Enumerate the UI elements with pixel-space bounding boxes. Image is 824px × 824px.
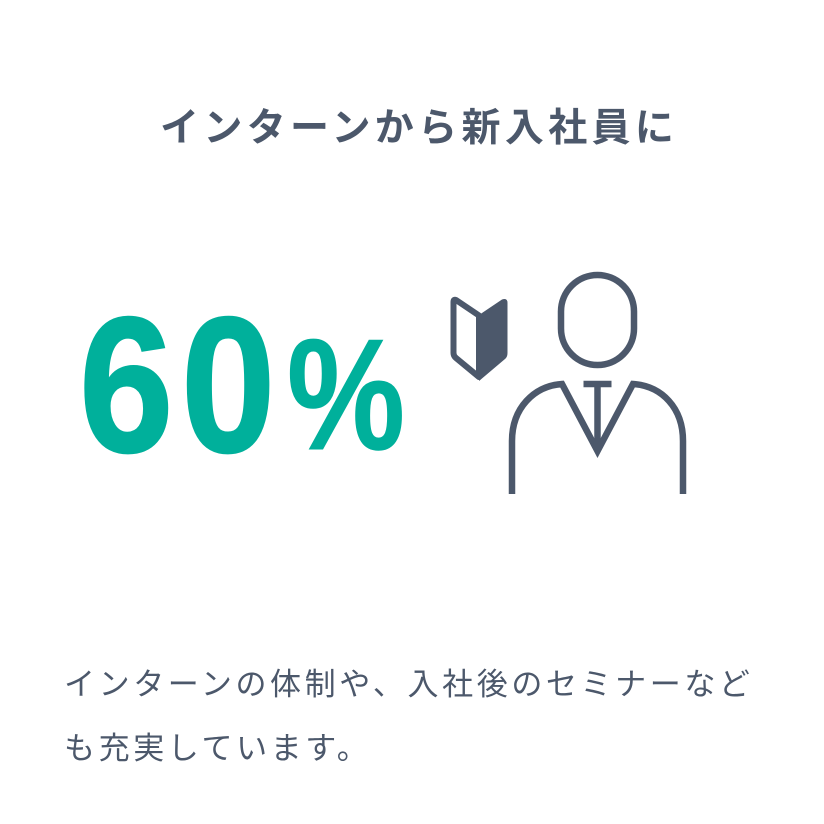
description text: [64, 667, 754, 766]
head: [561, 275, 634, 365]
description text: インターンの体制や、入社後のセミナーなど: [64, 667, 754, 702]
title: インターンから新入社員に: [160, 107, 678, 150]
big statistic: 60%: 6: [79, 276, 173, 493]
shoulders and collar: [512, 384, 683, 494]
big statistic: 60%: %: [287, 306, 405, 483]
description text: も充実しています。: [64, 731, 371, 766]
big statistic: 60%: 0: [181, 276, 275, 493]
tie: [584, 384, 612, 446]
